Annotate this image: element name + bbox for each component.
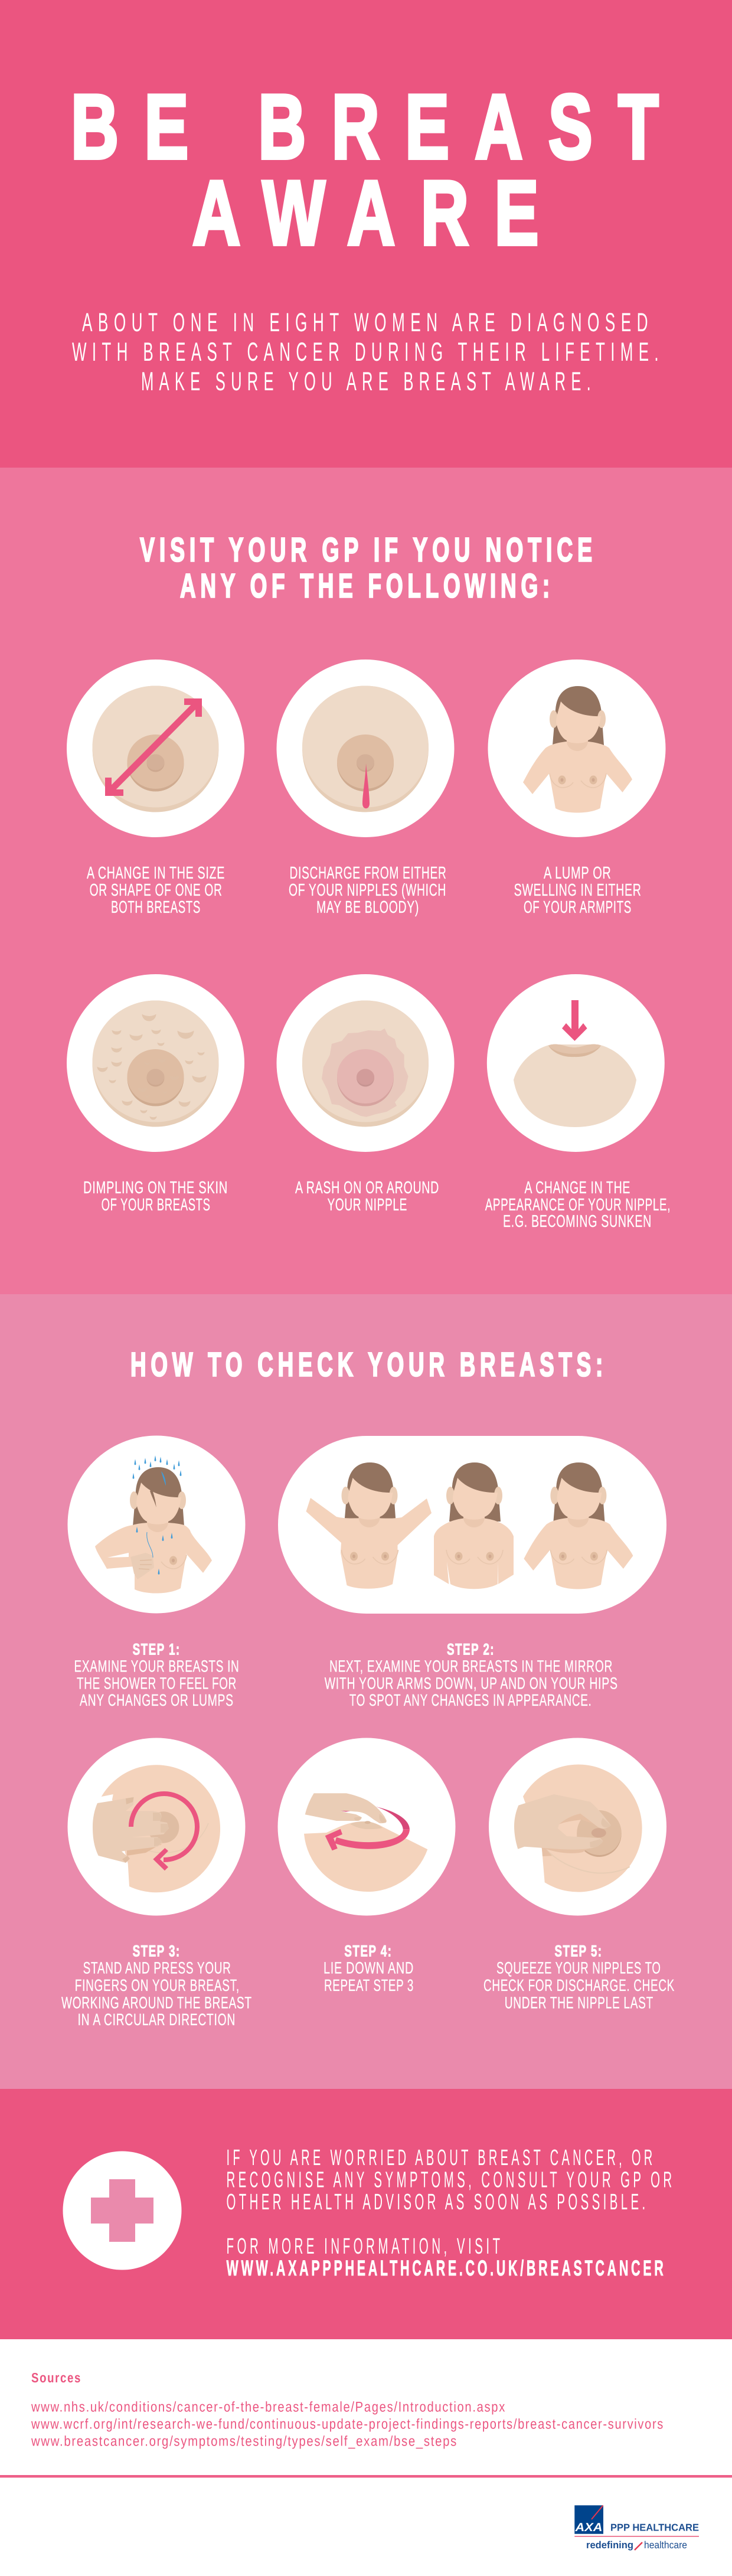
logo: AXA PPP healthcare: healthcare [644, 2539, 687, 2551]
advice text [227, 2146, 675, 2280]
label [514, 864, 642, 917]
icon: double arrow [109, 701, 198, 792]
icon: breast with hand [93, 1765, 220, 1892]
icon: rash patch [322, 1029, 409, 1117]
label: THE SHOWER TO FEEL FOR [77, 1674, 237, 1693]
label: E.G. BECOMING SUNKEN [503, 1212, 652, 1231]
symptom: armpit lump [488, 659, 666, 917]
source links [31, 2399, 664, 2450]
label: STAND AND PRESS YOUR [83, 1959, 231, 1977]
label [325, 1641, 618, 1709]
logo: AXA PPP healthcare: PPP HEALTHCARE [610, 2522, 699, 2533]
label: ANY CHANGES OR LUMPS [80, 1691, 234, 1709]
panel: sources [0, 2339, 732, 2576]
step 5 [483, 1738, 675, 2012]
label [485, 1178, 671, 1231]
icon: breast with squeezing hand [514, 1765, 642, 1892]
figure: woman in shower [95, 1455, 212, 1594]
step 2 [278, 1436, 666, 1709]
source links: www.breastcancer.org/symptoms/testing/types/self_exam/bse_steps [31, 2434, 458, 2450]
label [87, 864, 225, 917]
label: STEP 5: [555, 1942, 602, 1960]
icon: skin dimples [97, 1014, 207, 1119]
label: MAY BE BLOODY) [316, 898, 419, 917]
label: DIMPLING ON THE SKIN [83, 1178, 228, 1197]
figure: arms down [434, 1462, 514, 1589]
icon: discharge drop [362, 763, 370, 808]
sources heading: Sources [31, 2370, 81, 2385]
step 4 [277, 1738, 456, 1994]
logo: AXA PPP healthcare: redefining [586, 2539, 633, 2551]
label [83, 1178, 228, 1214]
label [323, 1942, 414, 1994]
symptom: rash [276, 974, 455, 1214]
label: OF YOUR NIPPLES (WHICH [289, 881, 446, 900]
label: STEP 1: [133, 1641, 181, 1658]
advice text: FOR MORE INFORMATION, VISIT [227, 2234, 503, 2259]
figure: hands on hips [524, 1462, 633, 1589]
title [71, 76, 684, 264]
label: FINGERS ON YOUR BREAST, [75, 1976, 240, 1994]
label: STEP 2: [447, 1641, 495, 1658]
logo: AXA PPP healthcare: AXA [574, 2521, 602, 2534]
label [289, 864, 446, 917]
label: EXAMINE YOUR BREASTS IN [74, 1657, 240, 1676]
icon: circular arrow [325, 1807, 410, 1850]
panel: header [0, 0, 732, 468]
step 3 [61, 1738, 252, 2029]
panel: how to check [0, 1294, 732, 2089]
label: STEP 3: [133, 1942, 181, 1960]
label: OR SHAPE OF ONE OR [90, 881, 223, 900]
source links: www.nhs.uk/conditions/cancer-of-the-breast-female/Pages/Introduction.aspx [31, 2399, 506, 2415]
icon: hand [305, 1793, 387, 1823]
symptom: discharge [276, 659, 455, 917]
label: TO SPOT ANY CHANGES IN APPEARANCE. [349, 1691, 592, 1709]
step 1 [67, 1436, 246, 1709]
icon: medical cross [63, 2151, 182, 2270]
heading: visit your GP [140, 531, 597, 605]
label: OF YOUR BREASTS [102, 1196, 211, 1214]
label: OF YOUR ARMPITS [524, 898, 632, 917]
label: WORKING AROUND THE BREAST [61, 1993, 252, 2012]
label [61, 1942, 252, 2029]
label: A CHANGE IN THE SIZE [87, 864, 225, 883]
label: IN A CIRCULAR DIRECTION [78, 2010, 236, 2029]
label: SWELLING IN EITHER [514, 881, 642, 900]
title: AWARE [192, 162, 564, 264]
symptom: dimpling [67, 974, 244, 1214]
label [483, 1942, 675, 2012]
intro text [72, 308, 664, 396]
label: A RASH ON OR AROUND [295, 1178, 439, 1197]
figure: woman [523, 686, 632, 812]
symptom: size change [67, 659, 244, 917]
label: DISCHARGE FROM EITHER [289, 864, 446, 883]
icon: down arrow [562, 1000, 587, 1041]
label: REPEAT STEP 3 [324, 1976, 414, 1994]
label: LIE DOWN AND [323, 1959, 414, 1977]
label: UNDER THE NIPPLE LAST [505, 1993, 653, 2012]
icon: sunken breast profile [514, 1044, 636, 1127]
symptom: sunken nipple [485, 974, 671, 1231]
label: YOUR NIPPLE [327, 1196, 407, 1214]
panel: symptoms [0, 468, 732, 1294]
panel: call to action [0, 2089, 732, 2339]
label: A CHANGE IN THE [524, 1178, 630, 1197]
label [295, 1178, 439, 1214]
icon: circular arrow [131, 1794, 197, 1870]
figure: arms up [306, 1462, 432, 1589]
label: A LUMP OR [544, 864, 612, 883]
label [74, 1641, 240, 1709]
label: NEXT, EXAMINE YOUR BREASTS IN THE MIRROR [329, 1657, 613, 1676]
logo: AXA PPP healthcare [574, 2505, 699, 2551]
label: STEP 4: [344, 1942, 392, 1960]
icon: lying breast [304, 1821, 427, 1892]
icon: water drops [133, 1455, 181, 1575]
label: BOTH BREASTS [111, 898, 201, 917]
